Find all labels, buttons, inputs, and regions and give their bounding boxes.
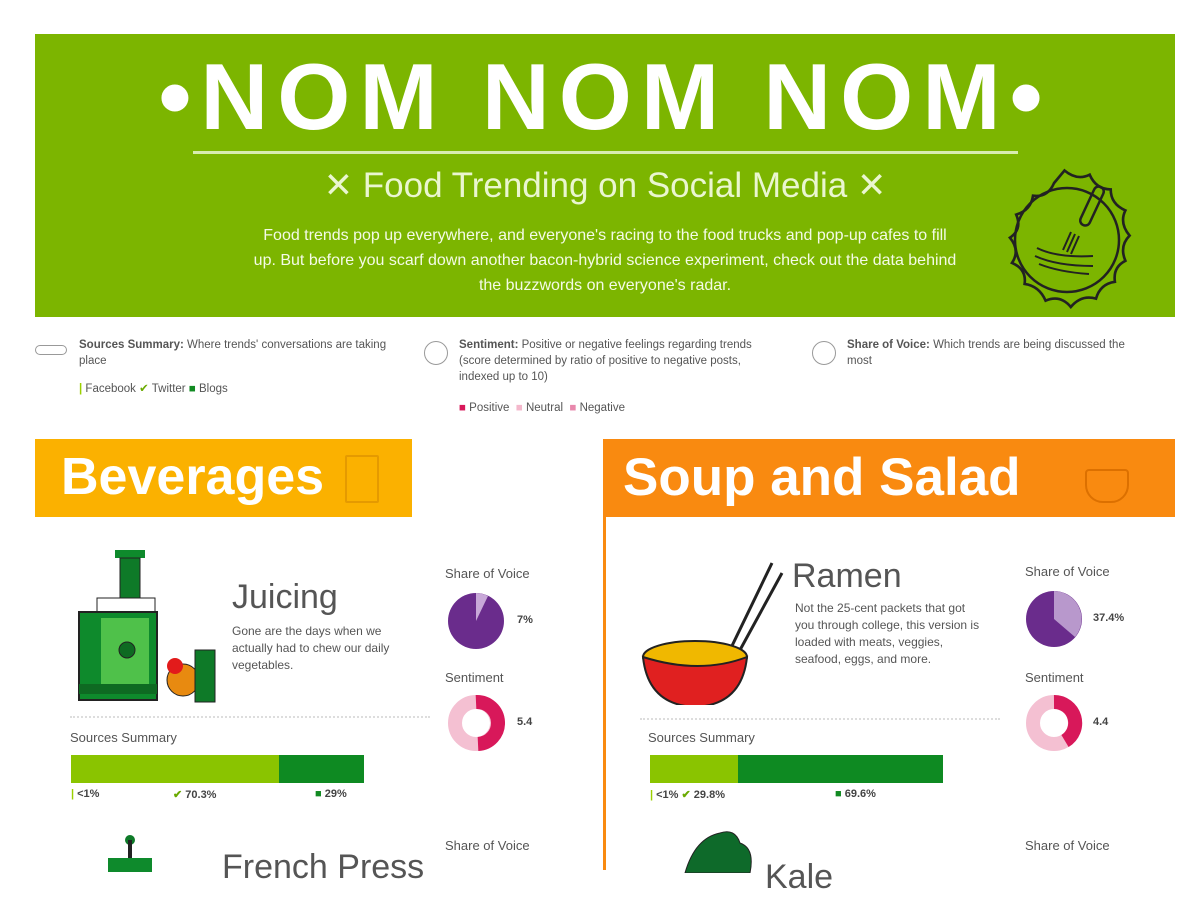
stats: ramen: Sentiment xyxy=(1025,670,1084,685)
legend: sources summary: Sources Summary: Where trends' conversations are taking place xyxy=(79,339,386,367)
icon: ramen bowl xyxy=(642,562,784,705)
panel header: soup and salad xyxy=(603,439,1175,517)
item: kale (partial) xyxy=(684,831,1110,896)
item: juicing: | <1% xyxy=(71,788,99,800)
item: juicing: ✔ 70.3% xyxy=(173,789,216,801)
icon: glass xyxy=(345,455,379,503)
subtitle: ✕ Food Trending on Social Media ✕ xyxy=(324,166,886,205)
title: •NOM NOM NOM• xyxy=(159,44,1051,149)
icon: juicer xyxy=(78,550,216,702)
icon: sources xyxy=(35,345,67,355)
icon: french press xyxy=(108,835,152,872)
legend: share of voice: Share of Voice: Which trends are being discussed the most xyxy=(847,339,1125,367)
bar chart: sources xyxy=(650,755,943,783)
icon: bowl xyxy=(1085,469,1129,503)
item: french press (partial): Share of Voice xyxy=(445,838,530,853)
title: Juicing: Juicing xyxy=(232,578,338,616)
item: french press (partial): French Press xyxy=(222,848,424,886)
panel header: beverages: Beverages xyxy=(61,448,324,506)
stats: juicing: Sentiment xyxy=(445,670,504,685)
icon: sentiment xyxy=(424,341,448,365)
item: kale (partial): Share of Voice xyxy=(1025,838,1110,853)
pie: share 7% xyxy=(448,593,504,649)
item: ramen: ■ 69.6% xyxy=(835,788,876,800)
item: juicing: ■ 29% xyxy=(315,788,347,800)
icon: kale xyxy=(684,831,752,873)
stats: ramen: 4.4 xyxy=(1093,716,1108,728)
panel header: soup and salad: Soup and Salad xyxy=(623,448,1021,507)
intro text: Food trends pop up everywhere, and everyone's racing to the food trucks and pop-up cafes to fill up. But before you scarf down another bacon-hybrid science experiment, check out the data behind the buzzwords on everyone's radar. xyxy=(254,227,956,294)
panel header: beverages xyxy=(35,439,412,517)
pie: share 37.4% xyxy=(1026,591,1082,647)
item: juicing xyxy=(70,550,430,801)
legend: sentiment: Sentiment: Positive or negative feelings regarding trends (score determined by ratio of positive to negative posts, indexed up to 10) xyxy=(459,339,752,383)
legend: sources summary xyxy=(35,339,386,395)
item: ramen: | <1% ✔ 29.8% xyxy=(650,789,725,801)
item: ramen: Sources Summary xyxy=(648,730,755,745)
stats: juicing: 7% xyxy=(517,614,533,626)
stats: ramen: Share of Voice xyxy=(1025,564,1110,579)
icon: clock xyxy=(812,341,836,365)
item: ramen: Not the 25-cent packets that got you through college, this version is loaded with meats, veggies, seafood, eggs, and more. xyxy=(795,601,979,666)
item: juicing: Sources Summary xyxy=(70,730,177,745)
item: ramen xyxy=(640,557,1000,801)
stats: ramen: 37.4% xyxy=(1093,612,1124,624)
text: Kale xyxy=(765,858,833,896)
legend: sources summary: | Facebook ✔ Twitter ■ Blogs xyxy=(79,383,228,395)
legend: sentiment xyxy=(424,339,752,414)
item: juicing: Gone are the days when we actually had to chew our daily vegetables. xyxy=(232,624,389,672)
donut: sentiment 5.4 xyxy=(448,695,505,751)
item: french press (partial) xyxy=(108,835,530,886)
stats: ramen xyxy=(1025,564,1124,751)
stats: juicing: 5.4 xyxy=(517,716,532,728)
header banner xyxy=(35,34,1175,317)
donut: sentiment 4.4 xyxy=(1026,695,1082,751)
icon: badge xyxy=(1008,168,1132,309)
stats: juicing xyxy=(445,566,533,751)
title: Ramen: Ramen xyxy=(792,557,902,595)
stats: juicing: Share of Voice xyxy=(445,566,530,581)
bar chart: sources xyxy=(71,755,364,783)
legend: sentiment: ■ Positive ■ Neutral ■ Negative xyxy=(459,402,625,414)
